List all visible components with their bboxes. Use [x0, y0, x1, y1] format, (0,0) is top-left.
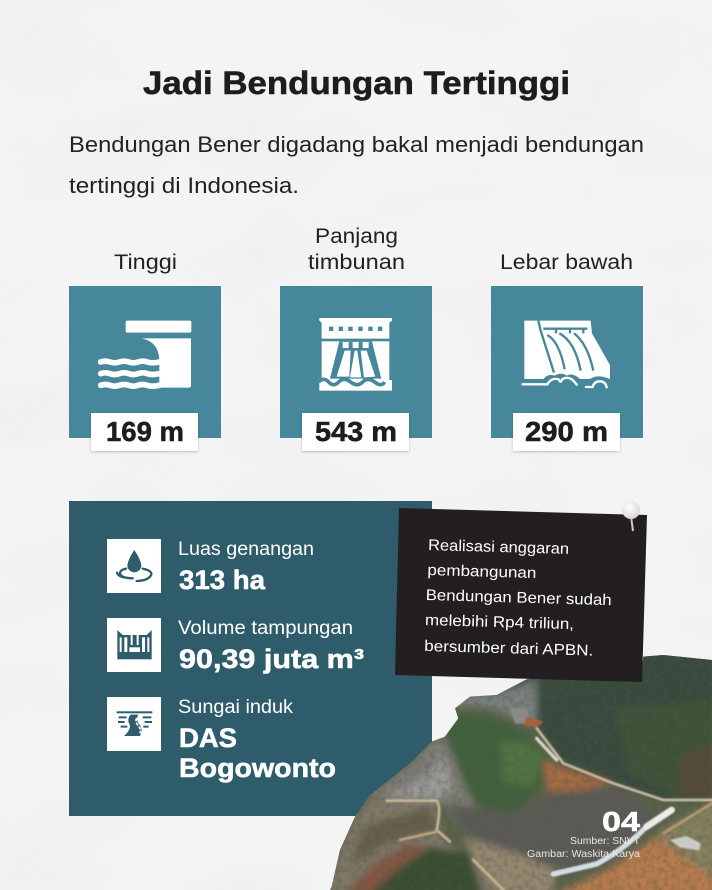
fact: luas genangan: 313 ha — [179, 565, 266, 595]
fact: sungai induk — [107, 697, 336, 783]
fact: sungai induk: Bogowonto — [179, 753, 336, 783]
callout text: Bendungan Bener sudah — [425, 587, 612, 609]
fact: volume tampungan: Volume tampungan — [178, 618, 353, 639]
fact: sungai induk: DAS — [179, 723, 237, 753]
label: lebar bawah: Lebar bawah — [500, 251, 633, 274]
page number and credits: Gambar: Waskita Karya — [527, 849, 640, 860]
label: panjang timbunan: timbunan — [308, 251, 405, 274]
callout text — [424, 537, 613, 660]
callout text: bersumber dari APBN. — [424, 638, 593, 660]
intro text — [69, 132, 644, 198]
value: 543 m: 543 m — [315, 416, 397, 447]
page number and credits: 04 — [602, 806, 641, 837]
value: 543 m — [302, 413, 409, 451]
callout text: pembangunan — [427, 562, 537, 582]
value: 290 m: 290 m — [525, 416, 608, 447]
label: tinggi: Tinggi — [114, 251, 177, 274]
fact: luas genangan — [107, 539, 314, 595]
icon: water drop — [117, 550, 151, 581]
fact: volume tampungan: 90,39 juta m³ — [179, 644, 364, 674]
icon: river — [117, 711, 152, 736]
title: Jadi Bendungan Tertinggi — [143, 65, 570, 101]
icon: dam overflow — [101, 321, 191, 388]
stat: panjang timbunan — [280, 225, 432, 451]
value: 290 m — [513, 413, 620, 451]
page number and credits: Sumber: SNVT — [570, 836, 640, 847]
value: 169 m: 169 m — [106, 416, 184, 447]
icon: push pin — [622, 501, 640, 531]
photo: dam construction hillside — [323, 640, 712, 890]
fact: volume tampungan — [107, 618, 364, 674]
intro text: Bendungan Bener digadang bakal menjadi bendungan — [69, 132, 644, 157]
fact: sungai induk: Sungai induk — [178, 697, 294, 718]
icon: dam side — [523, 321, 610, 387]
label: panjang timbunan — [308, 225, 405, 274]
stat: tinggi — [69, 251, 221, 451]
fact: luas genangan: Luas genangan — [178, 539, 314, 560]
page number and credits — [527, 806, 641, 860]
stat: lebar bawah — [491, 251, 643, 451]
callout: budget note — [395, 501, 647, 682]
label: panjang timbunan: Panjang — [315, 225, 398, 248]
callout text: Realisasi anggaran — [428, 537, 569, 558]
icon: dam front — [319, 318, 392, 391]
panel: dam facts — [69, 501, 432, 816]
value: 169 m — [91, 413, 198, 451]
callout text: melebihi Rp4 triliun, — [425, 612, 574, 633]
intro text: tertinggi di Indonesia. — [69, 173, 299, 198]
icon: reservoir — [117, 630, 152, 659]
